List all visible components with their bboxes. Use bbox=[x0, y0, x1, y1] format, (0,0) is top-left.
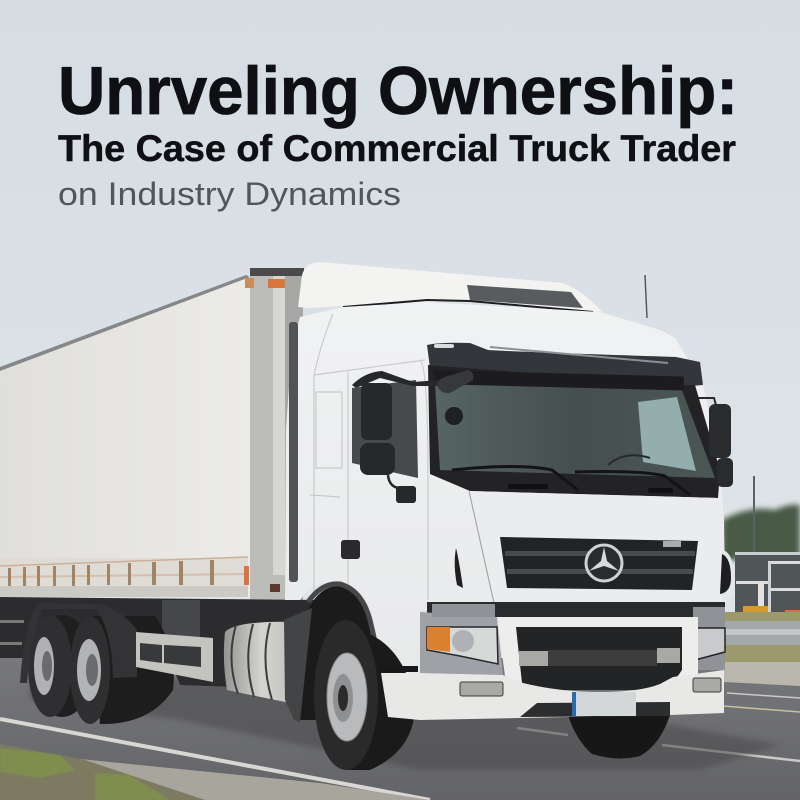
front wheel bbox=[314, 620, 415, 770]
background: guardrail bbox=[724, 621, 800, 645]
fog light right bbox=[693, 678, 721, 692]
ground shadow under truck bbox=[30, 670, 780, 770]
rear wheels bbox=[20, 603, 174, 724]
number plate bbox=[572, 692, 636, 716]
right door mirror bbox=[698, 398, 733, 487]
trailer marker light bbox=[268, 279, 285, 288]
trailer top edge bbox=[0, 275, 250, 371]
front right wheel bbox=[568, 715, 670, 759]
subtitle: on Industry Dynamics bbox=[58, 176, 401, 212]
windscreen spotter mirror bbox=[437, 370, 473, 425]
background: building bbox=[735, 552, 800, 619]
trailer side rail bbox=[0, 557, 249, 597]
headlight right bbox=[695, 628, 725, 660]
headlight housing left bbox=[420, 612, 503, 675]
bumper frame bbox=[497, 617, 698, 690]
title line 2: The Case of Commercial Truck Trader bbox=[58, 128, 736, 169]
headlight left bbox=[427, 627, 498, 664]
background: grass strip restored bbox=[722, 645, 800, 663]
background: sidewalk bbox=[724, 662, 800, 686]
side vent bbox=[455, 548, 463, 588]
door window bbox=[352, 380, 418, 478]
trailer bbox=[0, 268, 320, 690]
grille badge bbox=[663, 541, 681, 547]
windscreen frame bbox=[428, 365, 720, 498]
roof seam bbox=[343, 300, 593, 312]
wheel arch bbox=[300, 586, 384, 720]
fuel tank bbox=[224, 622, 300, 705]
road markings bbox=[0, 693, 800, 800]
title line 1: Unrveling Ownership: bbox=[58, 53, 738, 129]
antenna bbox=[645, 275, 647, 318]
cab step panel bbox=[284, 608, 312, 722]
curb and grass foreground bbox=[0, 744, 430, 800]
roof deflector bbox=[298, 262, 602, 312]
windscreen glass bbox=[435, 383, 715, 478]
background: trees bbox=[722, 505, 800, 560]
lower grille bbox=[516, 627, 682, 690]
trailer box side bbox=[0, 275, 250, 597]
cab shell bbox=[285, 302, 725, 673]
steering wheel bbox=[608, 455, 650, 465]
background: grass verge bbox=[722, 612, 800, 664]
chassis underside bbox=[0, 597, 320, 690]
grille bbox=[500, 537, 698, 590]
roof vent panel bbox=[467, 285, 583, 308]
door handle bbox=[341, 540, 360, 559]
background: lamp post bbox=[753, 476, 755, 552]
dark band below grille bbox=[427, 602, 725, 618]
fender step strip bbox=[378, 666, 418, 672]
rear mudguard bbox=[20, 603, 137, 683]
emblem bbox=[586, 545, 622, 581]
under-bumper dark trim bbox=[520, 702, 670, 717]
wipers bbox=[452, 466, 690, 495]
wheel: rear inner bbox=[70, 616, 174, 724]
fog light left bbox=[460, 682, 503, 696]
title block bbox=[58, 53, 738, 212]
front face panel bbox=[469, 491, 726, 603]
headlight housing right bbox=[693, 607, 725, 670]
visor highlight bbox=[490, 347, 668, 363]
sun visor bbox=[427, 343, 703, 387]
trailer rear column bbox=[250, 274, 303, 600]
wheel: rear outer bbox=[28, 615, 94, 717]
cab door seams bbox=[310, 314, 428, 600]
right side mirror housing bbox=[722, 550, 734, 602]
road bbox=[0, 658, 800, 800]
bumper bbox=[381, 670, 724, 720]
cab bbox=[285, 262, 734, 690]
side guard bracket bbox=[136, 632, 213, 682]
visor lights bbox=[434, 344, 454, 348]
left door mirror bbox=[352, 371, 440, 503]
